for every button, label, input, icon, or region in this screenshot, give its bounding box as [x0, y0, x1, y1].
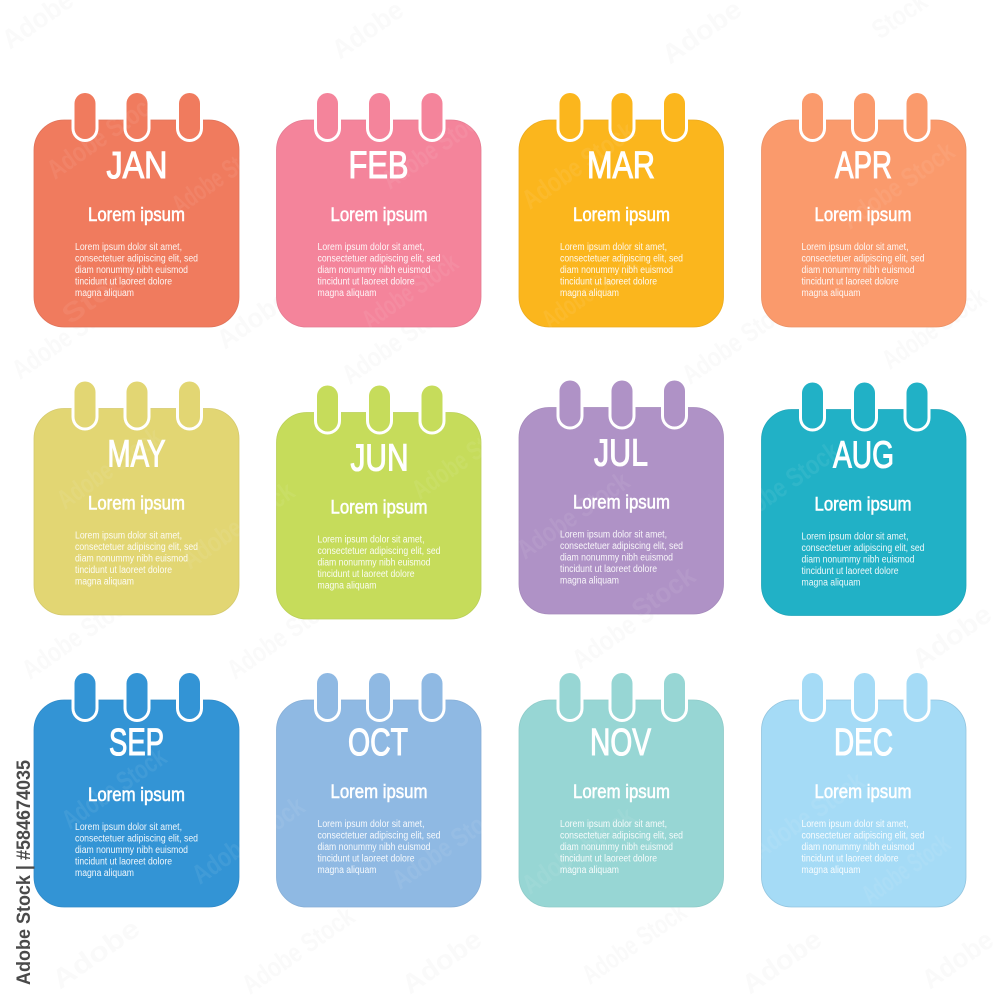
card: JUL: JUL	[594, 432, 648, 474]
card: DEC	[762, 670, 966, 907]
card: JUN: tincidunt ut laoreet dolore	[318, 569, 415, 580]
card: JUL: magna aliquam	[560, 576, 619, 586]
card: SEP: Lorem ipsum dolor sit amet,	[75, 822, 182, 833]
card: FEB: consectetuer adipiscing elit, sed	[318, 254, 440, 264]
card: DEC: magna aliquam	[802, 865, 860, 876]
card: JAN: Lorem ipsum dolor sit amet,	[75, 242, 182, 253]
watermark: over cards	[41, 85, 961, 910]
watermark: over cards: Adobe Stock	[41, 85, 166, 185]
card: APR: consectetuer adipiscing elit, sed	[802, 254, 924, 264]
card: OCT: Lorem ipsum	[330, 781, 428, 803]
card: FEB: magna aliquam	[318, 288, 376, 299]
card: NOV: diam nonummy nibh euismod	[560, 842, 673, 853]
card: MAY: MAY	[108, 434, 166, 476]
card: OCT: Lorem ipsum dolor sit amet,	[318, 819, 424, 830]
card: AUG: Lorem ipsum	[814, 494, 912, 516]
card: JAN: Lorem ipsum	[88, 204, 185, 226]
card: MAY: diam nonummy nibh euismod	[75, 554, 188, 564]
watermark: background: Adobe Stock	[221, 585, 346, 685]
card: JUL: tincidunt ut laoreet dolore	[560, 564, 657, 575]
card: JUN: Lorem ipsum dolor sit amet,	[318, 534, 424, 546]
card: MAY	[34, 378, 239, 615]
card: FEB: Lorem ipsum dolor sit amet,	[318, 242, 424, 253]
card: SEP	[34, 670, 239, 907]
card: SEP: diam nonummy nibh euismod	[75, 845, 188, 856]
card: MAR: diam nonummy nibh euismod	[560, 265, 673, 276]
watermark: background: Adobe	[211, 284, 294, 355]
card: AUG: Lorem ipsum dolor sit amet,	[802, 532, 908, 542]
card: JAN: JAN	[106, 145, 168, 187]
card: NOV: consectetuer adipiscing elit, sed	[560, 830, 683, 842]
card: AUG: tincidunt ut laoreet dolore	[802, 566, 899, 577]
card: DEC: Lorem ipsum dolor sit amet,	[802, 819, 908, 830]
watermark: over cards: Adobe Stock	[516, 800, 641, 900]
card: APR: APR	[835, 145, 892, 187]
watermark: over cards: Adobe Stock	[356, 247, 464, 335]
card: OCT: diam nonummy nibh euismod	[318, 842, 430, 853]
watermark: over cards: Adobe Stock	[511, 465, 636, 565]
card: FEB: tincidunt ut laoreet dolore	[318, 276, 415, 288]
watermark: over cards: Adobe Stock	[56, 741, 172, 835]
card: NOV: magna aliquam	[560, 865, 619, 876]
card: JUN: JUN	[350, 438, 408, 480]
card: FEB: diam nonummy nibh euismod	[318, 265, 430, 276]
card: NOV: NOV	[590, 722, 651, 764]
card: DEC: consectetuer adipiscing elit, sed	[802, 830, 924, 842]
card: JAN	[34, 90, 239, 327]
card: MAR: consectetuer adipiscing elit, sed	[560, 254, 683, 264]
card: MAR: MAR	[587, 145, 655, 187]
watermark: background: Adobe Stock	[566, 570, 699, 675]
card: SEP: Lorem ipsum	[88, 784, 185, 806]
watermark: background: Adobe Stock	[6, 285, 131, 385]
watermark: over cards: Adobe Stock	[721, 435, 846, 535]
card: FEB: Lorem ipsum	[330, 204, 428, 226]
card: MAR	[519, 90, 724, 327]
card: NOV	[519, 670, 724, 907]
watermark: background: Adobe	[736, 924, 827, 1000]
watermark: background: Adobe	[916, 924, 999, 995]
card: MAY: consectetuer adipiscing elit, sed	[75, 542, 198, 553]
card: JAN: magna aliquam	[75, 288, 134, 299]
card: OCT: consectetuer adipiscing elit, sed	[318, 830, 440, 842]
watermark: over cards: Stock	[56, 253, 148, 330]
stock id label: Adobe Stock | #584674035	[14, 760, 35, 985]
card: JUN: consectetuer adipiscing elit, sed	[318, 546, 440, 557]
card: SEP: magna aliquam	[75, 868, 134, 879]
card: SEP: consectetuer adipiscing elit, sed	[75, 834, 198, 844]
card: DEC: diam nonummy nibh euismod	[802, 842, 914, 853]
card: SEP: SEP	[109, 722, 164, 764]
card: OCT: OCT	[348, 722, 408, 764]
card: AUG	[762, 380, 966, 616]
watermark: over cards: Adobe Stock	[836, 135, 961, 235]
card: OCT: magna aliquam	[318, 865, 376, 876]
card: JUL	[519, 378, 724, 614]
watermark: over cards: Adobe Stock	[176, 475, 301, 575]
card: FEB	[276, 90, 481, 327]
card: MAR: Lorem ipsum	[573, 204, 670, 226]
card: JUL: consectetuer adipiscing elit, sed	[560, 541, 683, 552]
card: AUG: consectetuer adipiscing elit, sed	[802, 543, 924, 554]
card: DEC: DEC	[834, 722, 893, 764]
card: JAN: diam nonummy nibh euismod	[75, 265, 188, 276]
card: JUN: magna aliquam	[318, 580, 376, 592]
card: JAN: consectetuer adipiscing elit, sed	[75, 254, 198, 264]
card: DEC: Lorem ipsum	[814, 781, 912, 803]
card: OCT: tincidunt ut laoreet dolore	[318, 854, 415, 864]
watermark: over cards: Adobe Stock	[386, 795, 511, 895]
card: NOV: tincidunt ut laoreet dolore	[560, 854, 657, 864]
card: DEC: tincidunt ut laoreet dolore	[802, 854, 899, 864]
card: APR: diam nonummy nibh euismod	[802, 265, 914, 276]
watermark: background: Adobe	[396, 924, 487, 1000]
card: NOV: Lorem ipsum dolor sit amet,	[560, 819, 667, 830]
watermark: over cards: Stock	[626, 560, 702, 625]
card: AUG: AUG	[833, 434, 894, 476]
card: JUN	[276, 382, 481, 619]
card: JUL: Lorem ipsum	[573, 492, 670, 514]
card: MAY: Lorem ipsum	[88, 492, 185, 514]
card: JUN: Lorem ipsum	[330, 496, 428, 518]
watermark: background: Adobe Stock	[336, 290, 461, 390]
watermark: over cards: Adobe Stock	[746, 765, 871, 865]
card: FEB: FEB	[348, 145, 408, 187]
card: JAN: tincidunt ut laoreet dolore	[75, 276, 172, 288]
watermark: over cards: Adobe Stock	[166, 132, 274, 220]
watermark: over cards: Adobe Stock	[516, 115, 641, 215]
card: AUG: magna aliquam	[802, 578, 860, 588]
watermark: background: Adobe Stock	[676, 290, 801, 390]
card: APR	[762, 90, 966, 327]
watermark: over cards: Adobe Stock	[376, 101, 492, 195]
watermark: background: Adobe Stock	[16, 585, 141, 685]
card: AUG: diam nonummy nibh euismod	[802, 554, 914, 566]
watermark: over cards: Adobe Stock	[186, 790, 311, 890]
watermark: background: Adobe Stock	[236, 900, 361, 1000]
card: APR: Lorem ipsum	[814, 204, 912, 226]
watermark: over cards: Adobe Stock	[51, 421, 167, 515]
card: MAR: magna aliquam	[560, 288, 619, 299]
card: APR: tincidunt ut laoreet dolore	[802, 276, 899, 288]
card: JUL: diam nonummy nibh euismod	[560, 552, 673, 564]
watermark: over cards: Adobe Stock	[536, 247, 644, 335]
card: SEP: tincidunt ut laoreet dolore	[75, 856, 172, 868]
card: JUL: Lorem ipsum dolor sit amet,	[560, 530, 667, 540]
card: MAY: tincidunt ut laoreet dolore	[75, 565, 172, 576]
card: MAY: magna aliquam	[75, 576, 134, 588]
card: JUN: diam nonummy nibh euismod	[318, 558, 430, 568]
card: NOV: Lorem ipsum	[573, 781, 670, 803]
card: APR: magna aliquam	[802, 288, 860, 299]
card: MAR: tincidunt ut laoreet dolore	[560, 276, 657, 288]
watermark: over cards: Adobe Stock	[406, 411, 522, 505]
watermark: background: Adobe	[46, 913, 145, 995]
watermark: background: Adobe	[906, 599, 997, 675]
card: APR: Lorem ipsum dolor sit amet,	[802, 242, 908, 253]
watermark: background: Adobe Stock	[576, 896, 692, 990]
card: MAY: Lorem ipsum dolor sit amet,	[75, 530, 182, 542]
card: MAR: Lorem ipsum dolor sit amet,	[560, 242, 667, 253]
card: OCT	[276, 670, 481, 907]
